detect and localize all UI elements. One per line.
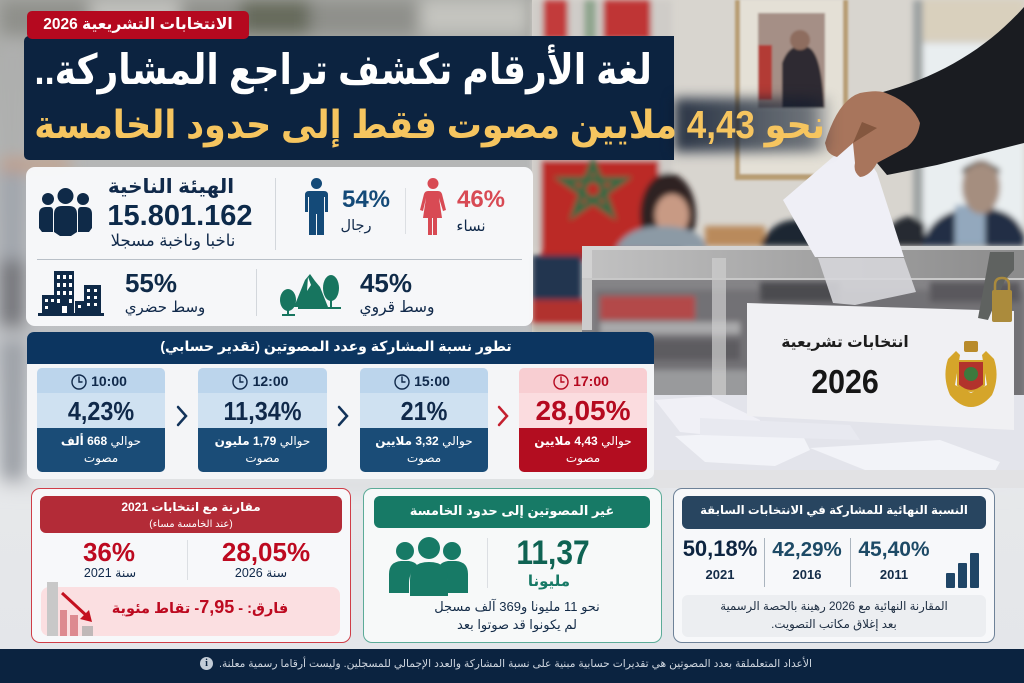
card: 10:00 (37, 368, 165, 472)
women label: نساء (456, 218, 486, 235)
previous elections header: النسبة النهائية للمشاركة في الانتخابات السابقة (700, 504, 968, 517)
rural label: وسط قروي (359, 299, 435, 316)
card: 17:00 (519, 368, 647, 472)
non-voters header: غير المصوتين إلى حدود الخامسة (410, 503, 614, 518)
comparison 2021 label: سنة 2021 (84, 566, 136, 580)
title panel (24, 36, 674, 160)
voters (198, 428, 327, 472)
card: 15:00 (360, 368, 488, 472)
men label: رجال (341, 218, 371, 234)
non-voters description: نحو 11 مليونا و369 آلف مسجل (434, 599, 600, 614)
hand and sleeve (825, 7, 1024, 177)
comparison header (40, 496, 342, 533)
voters: حوالي 668 ألف (61, 434, 141, 448)
percentage: 4,23% (68, 396, 134, 426)
men share: 54% (342, 186, 390, 213)
tag: legislative elections 2026: الانتخابات التشريعية 2026 (43, 16, 233, 33)
icon: declining bars with arrow (47, 582, 93, 636)
padlock and hasp (978, 252, 1014, 322)
previous elections note (682, 595, 986, 637)
title extension shadow (674, 98, 834, 152)
percentage: 21% (401, 396, 447, 426)
icon: electorate people (39, 188, 92, 236)
2021 year: 2021 (706, 567, 734, 582)
non-voters number: 11,37 (516, 534, 590, 572)
ballot box (582, 246, 1024, 446)
difference box (41, 587, 340, 636)
title line 2: نحو 4,43 ملايين مصوت فقط إلى حدود الخامسة (34, 104, 825, 147)
ballot card caption: انتخابات تشريعية (781, 334, 909, 351)
voters: مصوت (407, 451, 441, 465)
voters (519, 428, 647, 472)
time: 17:00 (573, 373, 609, 389)
voters: حوالي 3,32 ملايين (375, 434, 473, 448)
panel: non-voters (363, 488, 662, 643)
icon: info: i (205, 658, 208, 669)
ballot box label card (747, 303, 1014, 430)
icon: trees and mountain (280, 274, 341, 316)
comparison header: (عند الخامسة مساء) (149, 519, 233, 530)
voters: حوالي 1,79 مليون (215, 434, 310, 448)
panel: previous elections (673, 488, 995, 643)
2016 year: 2016 (793, 567, 821, 582)
non-voters unit: مليونا (528, 573, 570, 590)
time: 15:00 (414, 373, 450, 389)
panel: comparison with 2021 (31, 488, 351, 643)
footer note: الأعداد المتعلملقة بعدد المصوتين هي تقديرات حسابية مبنية على نسبة المشاركة والعدد الإجمالي للمسجلين. وليست أرقاما رسمية معلنة. (219, 658, 812, 670)
tag: legislative elections 2026 (27, 11, 249, 39)
comparison 2026 value: 28,05% (222, 537, 310, 567)
icon: rising bars (946, 553, 979, 588)
panel: turnout timeline (27, 332, 654, 479)
panel: electorate (26, 167, 533, 326)
electorate heading: الهيئة الناخية (108, 176, 234, 198)
voters (360, 428, 488, 472)
footer band (0, 649, 1024, 683)
voters: مصوت (245, 451, 280, 465)
emblem of Morocco (945, 341, 997, 407)
timeline header (27, 332, 654, 364)
percentage: 11,34% (223, 396, 302, 426)
non-voters description (434, 598, 600, 632)
timeline header: تطور نسبة المشاركة وعدد المصوتين (تقدير حسابي) (160, 338, 512, 354)
voters: مصوت (84, 451, 118, 465)
icon: woman (420, 178, 446, 235)
2011 rate: 45,40% (858, 538, 930, 561)
time: 10:00 (91, 373, 127, 389)
2016 rate: 42,29% (772, 538, 842, 561)
voters: مصوت (566, 451, 600, 465)
electorate caption: ناخبا وناخبة مسجلا (111, 232, 235, 250)
previous elections header (682, 496, 986, 529)
rural share: 45% (360, 268, 412, 298)
icon: non-voters people (389, 537, 468, 596)
clock and arrow icons (71, 374, 569, 426)
ballots (654, 395, 1024, 488)
ballot paper (783, 138, 916, 305)
comparison 2026 label: سنة 2026 (235, 566, 287, 580)
previous elections note: بعد إغلاق مكاتب التصويت. (771, 618, 897, 631)
icon: city (38, 271, 104, 316)
non-voters description: لم يكونوا قد صوتوا بعد (457, 617, 577, 632)
card: 12:00 (198, 368, 327, 472)
ballot card year: 2026 (811, 363, 879, 400)
title line 1: لغة الأرقام تكشف تراجع المشاركة.. (35, 46, 652, 93)
2011 year: 2011 (880, 567, 908, 582)
voters (37, 428, 165, 472)
urban label: وسط حضري (125, 299, 205, 316)
non-voters header (374, 496, 650, 528)
comparison header: مقارنة مع انتخابات 2021 (121, 500, 261, 514)
icon: man (305, 178, 328, 235)
comparison 2021 value: 36% (83, 537, 135, 567)
previous elections note: المقارنة النهائية مع 2026 رهينة بالحصة الرسمية (720, 600, 948, 613)
icon: info (200, 657, 213, 670)
women share: 46% (457, 186, 505, 213)
percentage: 28,05% (536, 395, 630, 426)
electorate number: 15.801.162 (107, 200, 253, 232)
2021 rate: 50,18% (683, 536, 757, 561)
difference text: فارق: - 7,95- تقاط مئوية (112, 597, 288, 617)
urban share: 55% (125, 268, 177, 298)
time: 12:00 (253, 373, 288, 389)
voters: حوالي 4,43 ملايين (534, 434, 632, 448)
